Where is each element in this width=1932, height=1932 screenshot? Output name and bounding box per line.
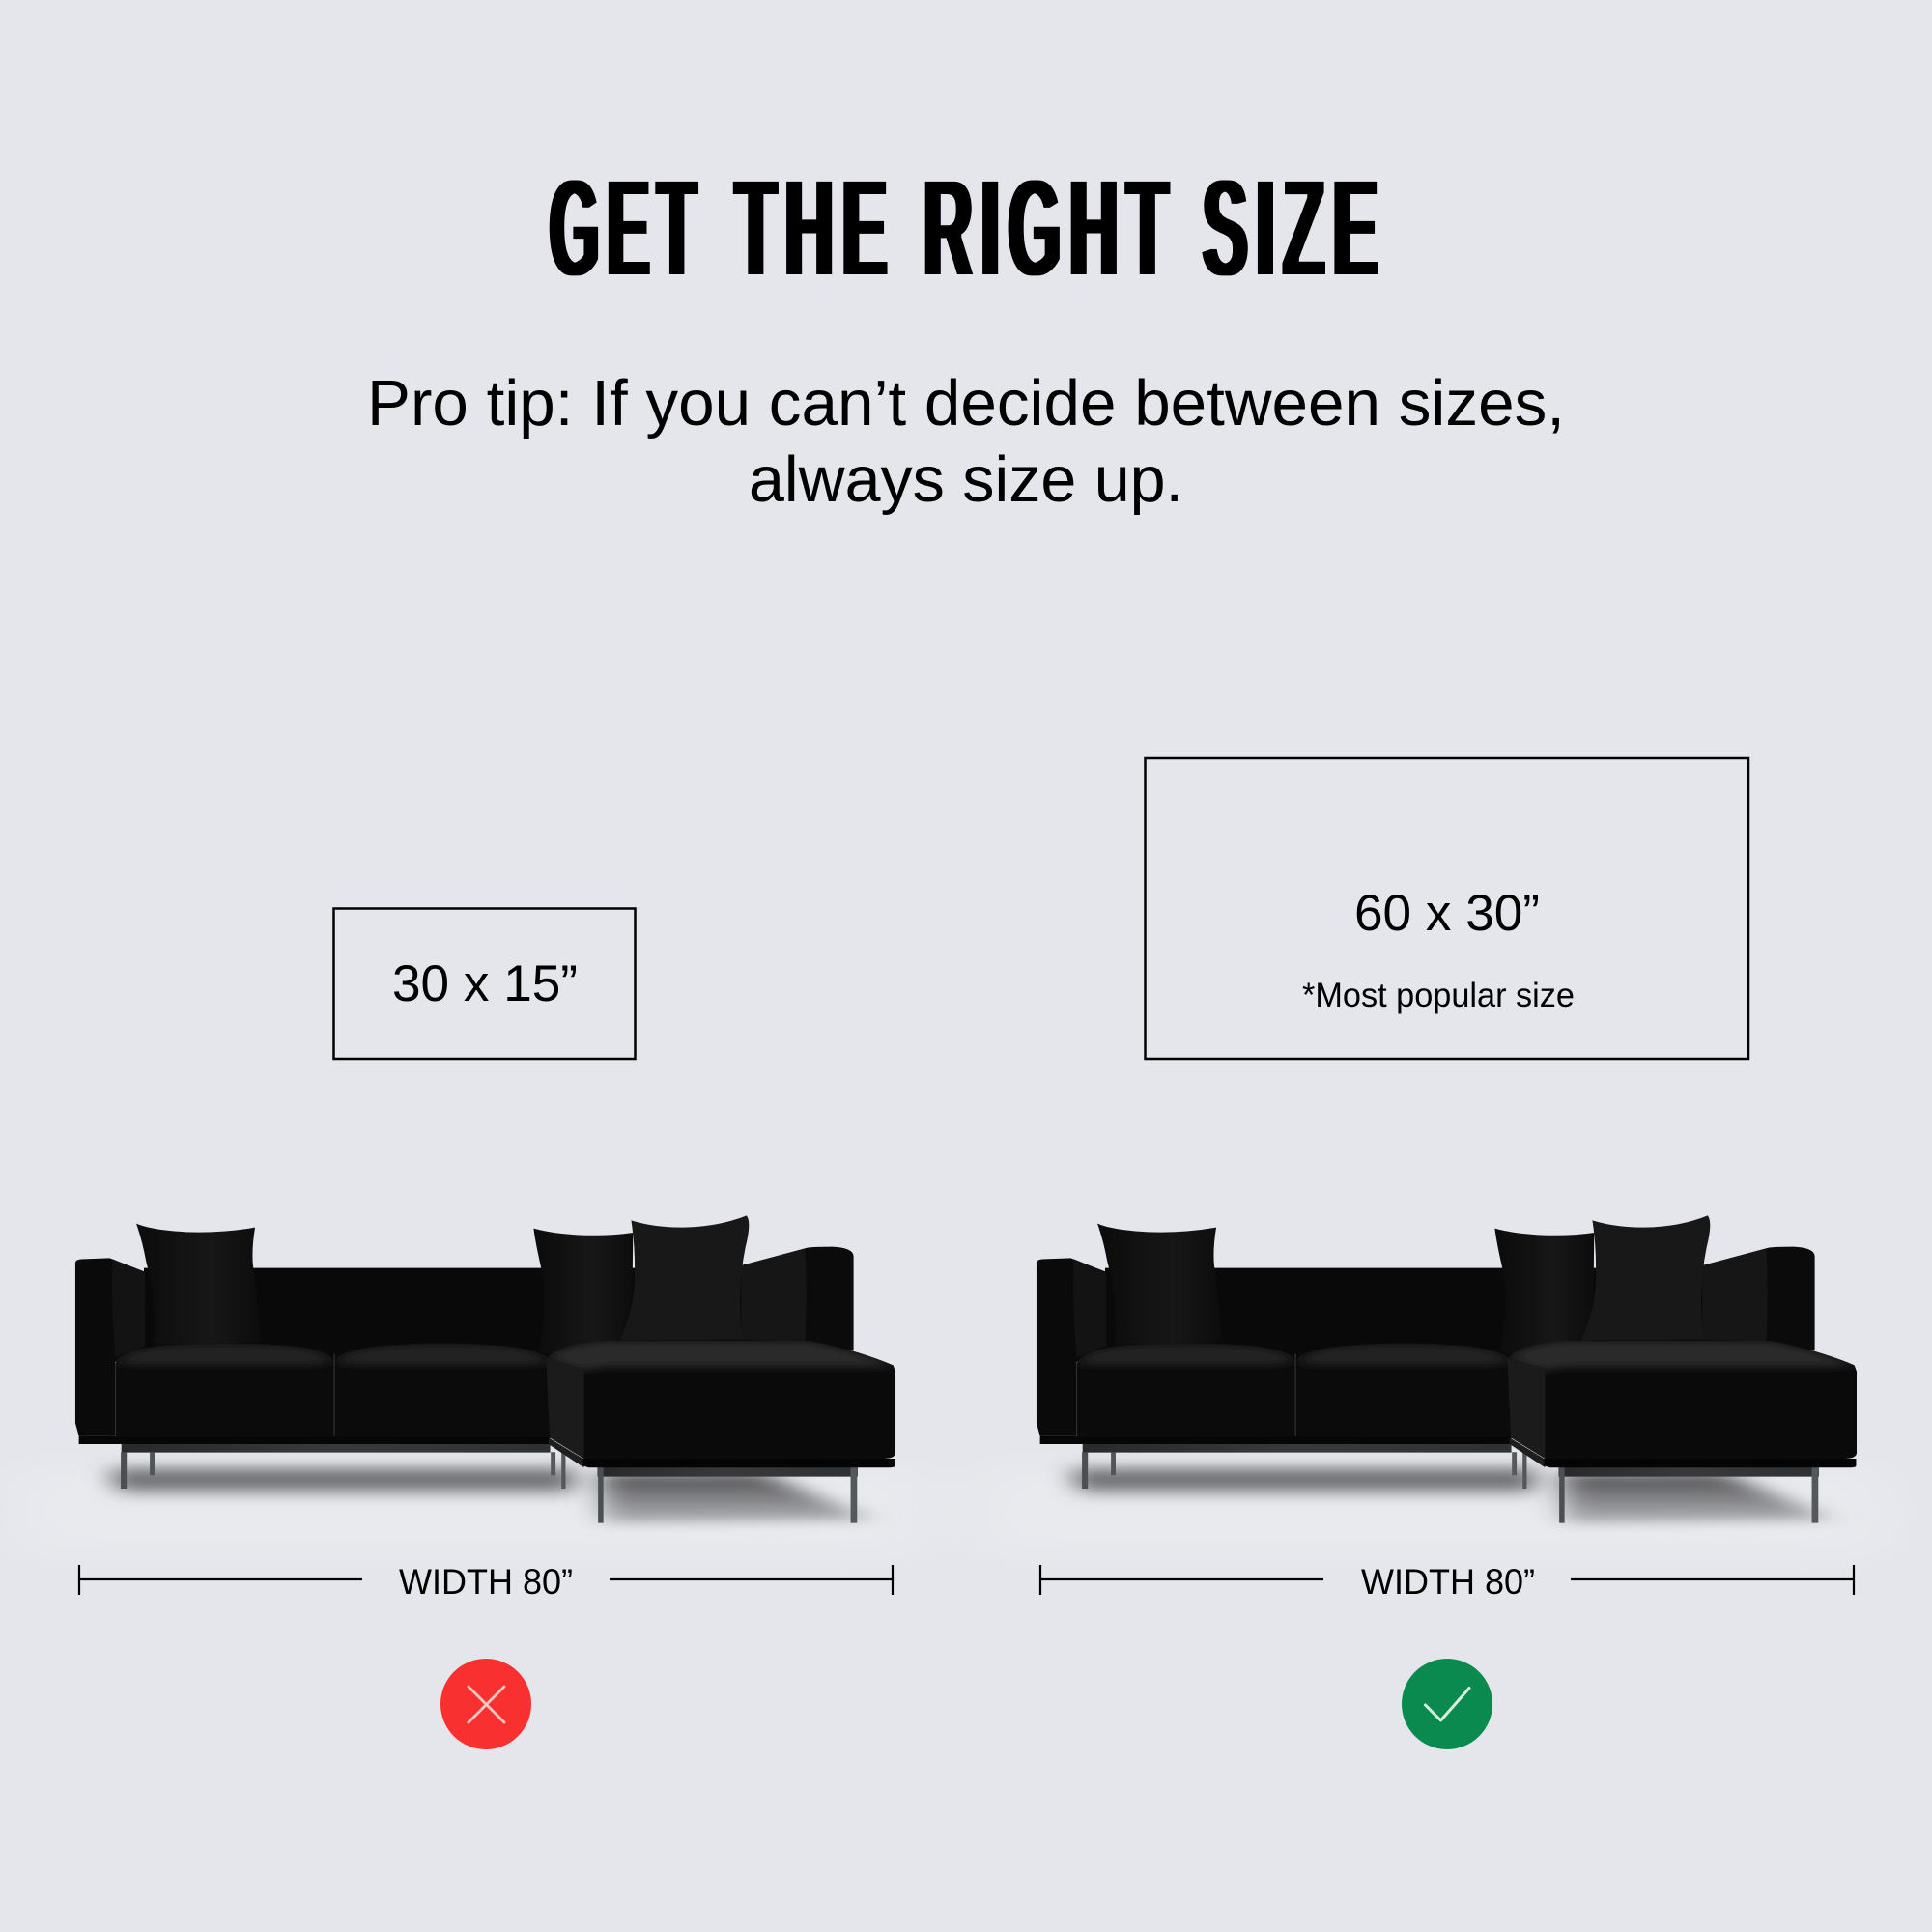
panel: too small size [15,908,925,1749]
text: SIZE [1203,151,1386,305]
title: THE [735,151,895,305]
icon: red cross [440,1659,531,1749]
frame: 30 x 15: 30 x 15” [392,955,578,1012]
width dimension, right: WIDTH 80” [1361,1562,1535,1602]
icon: green check [1402,1659,1492,1749]
frame: 30 x 15 [334,908,636,1059]
frame: 60 x 30: *Most popular size [1302,977,1575,1014]
width dimension, left [79,1562,893,1602]
title [550,151,1386,305]
subtitle: pro tip [367,367,1565,516]
width dimension, right [1040,1562,1854,1602]
subtitle: pro tip: Pro tip: If you can’t decide between sizes, [367,367,1565,440]
subtitle: pro tip: always size up. [749,443,1183,516]
frame: 60 x 30 [1146,758,1748,1059]
sofa illustration, right [977,1215,1887,1555]
title: RIGHT [923,151,1177,305]
frame: 60 x 30: 60 x 30” [1354,885,1540,942]
sofa illustration, left [15,1215,925,1555]
title: GET [550,151,704,305]
panel: recommended size [977,758,1887,1749]
width dimension, left: WIDTH 80” [399,1562,573,1602]
